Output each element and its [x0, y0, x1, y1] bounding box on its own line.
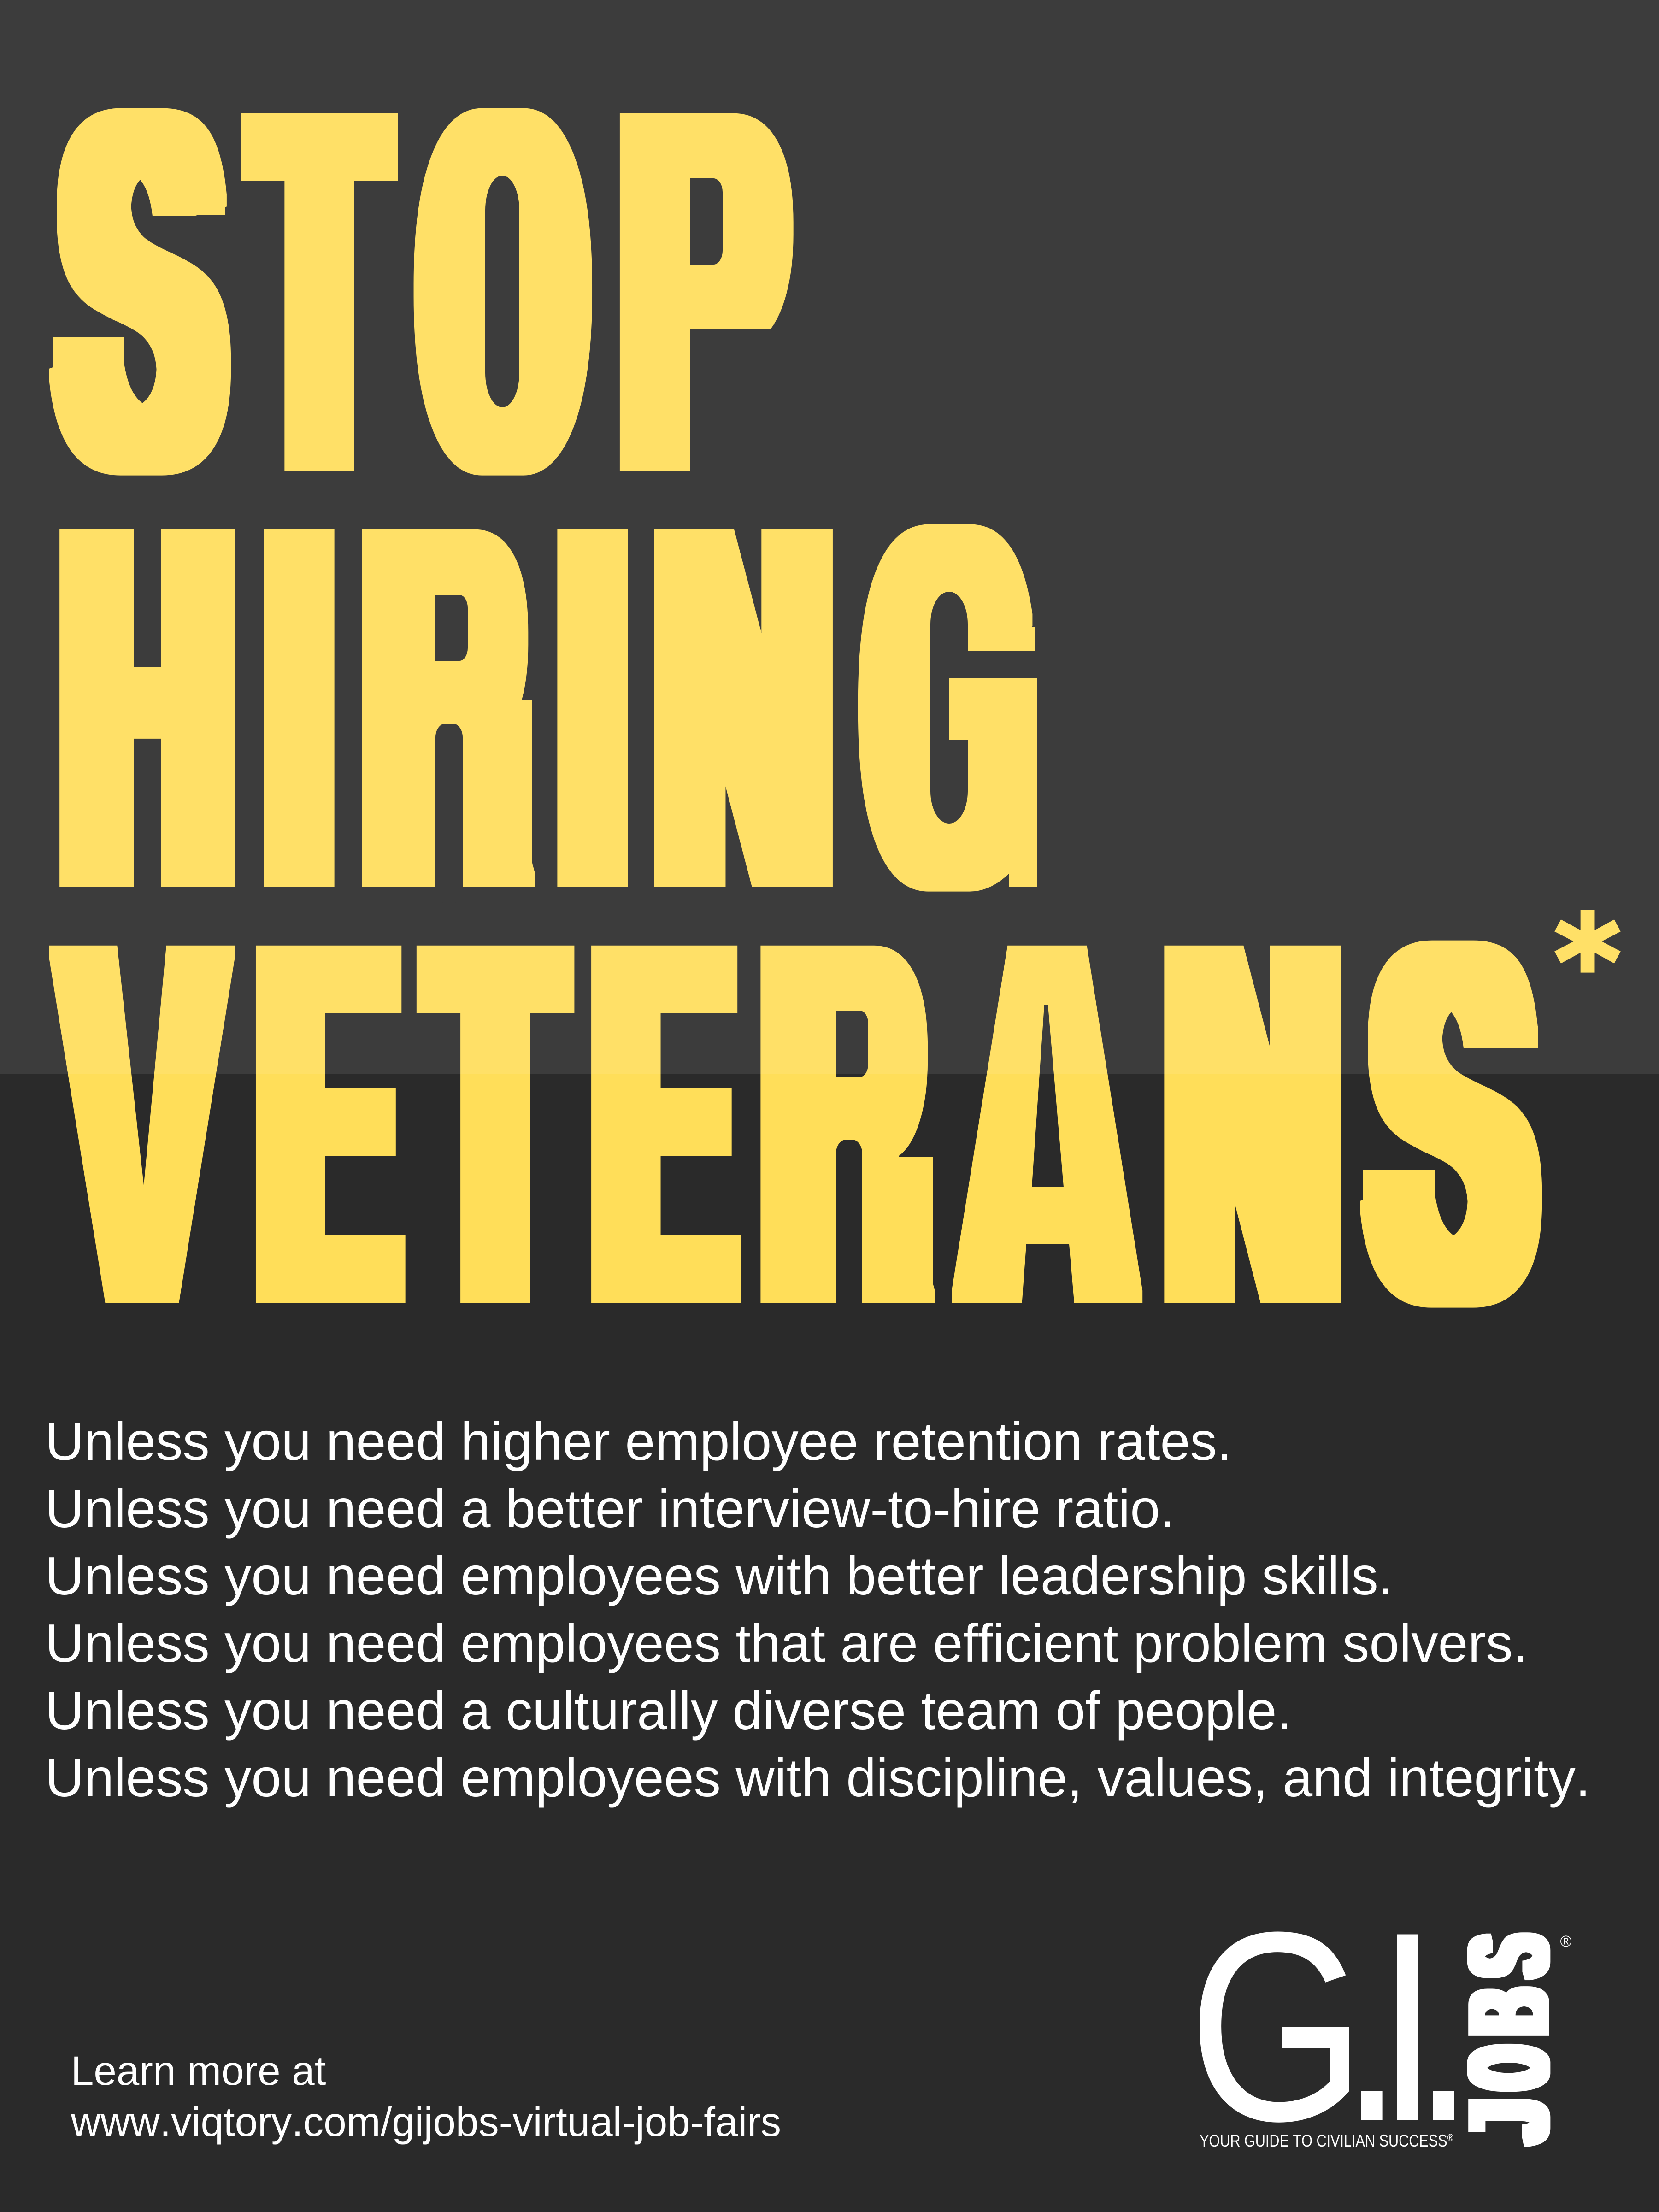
text block: list of reasons	[45, 1411, 1590, 1808]
logo wordmark: G.I.: .	[1341, 1876, 1403, 2177]
title line: HIRING: I	[565, 426, 621, 987]
title: Stop hiring veterans	[63, 10, 1621, 1403]
reason 6: Unless you need employees with discipline, values, and integrity.	[45, 1747, 1590, 1808]
title line: STOP: T	[259, 10, 379, 571]
logo wordmark: JOBS rotated: S	[1447, 1936, 1571, 1977]
title: Stop hiring veterans: P	[625, 10, 781, 571]
reason 3: Unless you need employees with better leadership skills.	[45, 1546, 1393, 1606]
logo wordmark: JOBS rotated	[1447, 1936, 1571, 2142]
title line: STOP: O	[426, 10, 580, 571]
title: Stop hiring veterans: G	[871, 426, 1027, 987]
call to action: learn more	[71, 2048, 781, 2145]
title line: VETERANS: A	[967, 842, 1128, 1403]
G crossbar fill	[949, 678, 968, 740]
title line: VETERANS: V	[68, 842, 217, 1403]
logo wordmark: G.I.: G	[1188, 1876, 1366, 2177]
title line: HIRING: N	[659, 426, 828, 987]
asterisk: *	[1554, 888, 1621, 1036]
title line: HIRING: R	[369, 426, 519, 987]
title line: STOP: S	[63, 10, 219, 571]
title line: VETERANS: N	[1170, 842, 1335, 1403]
logo tagline: ®	[1447, 2132, 1453, 2143]
title line: HIRING	[65, 426, 1027, 987]
heading weight fills: terminals and legs	[53, 194, 1538, 1303]
title line: VETERANS: E	[599, 842, 728, 1403]
title line: VETERANS: T	[435, 842, 556, 1403]
title line: HIRING: H	[65, 426, 230, 987]
reason 5: Unless you need a culturally diverse team of people.	[45, 1680, 1292, 1741]
title line: VETERANS: R	[767, 842, 918, 1403]
logo: G.I. Jobs	[1188, 1876, 1572, 2177]
logo tagline: YOUR GUIDE TO CIVILIAN SUCCESS	[1200, 2131, 1499, 2150]
reason 2: Unless you need a better interview-to-hire ratio.	[45, 1478, 1175, 1539]
title line: HIRING: I	[271, 426, 327, 987]
logo registered mark: ®	[1560, 1933, 1572, 1950]
logo wordmark: JOBS rotated: J	[1447, 2099, 1571, 2142]
heading counters: letter interiors	[117, 176, 1075, 1319]
learn more label: Learn more at	[71, 2048, 326, 2094]
logo wordmark: JOBS rotated: O	[1447, 2047, 1571, 2088]
logo wordmark: G.I.: I	[1377, 1876, 1439, 2177]
logo wordmark: JOBS rotated: B	[1447, 1989, 1571, 2034]
top band: translucent light overlay	[0, 0, 1659, 1074]
reason 4: Unless you need employees that are efficient problem solvers.	[45, 1613, 1528, 1673]
title line: VETERANS: E	[264, 842, 392, 1403]
title line: VETERANS	[68, 842, 1530, 1403]
title line: STOP	[63, 10, 781, 571]
reason 1: Unless you need higher employee retention rates.	[45, 1411, 1232, 1471]
website url: www.viqtory.com/gijobs-virtual-job-fairs	[71, 2099, 781, 2145]
logo wordmark: G.I.: .	[1412, 1876, 1475, 2177]
